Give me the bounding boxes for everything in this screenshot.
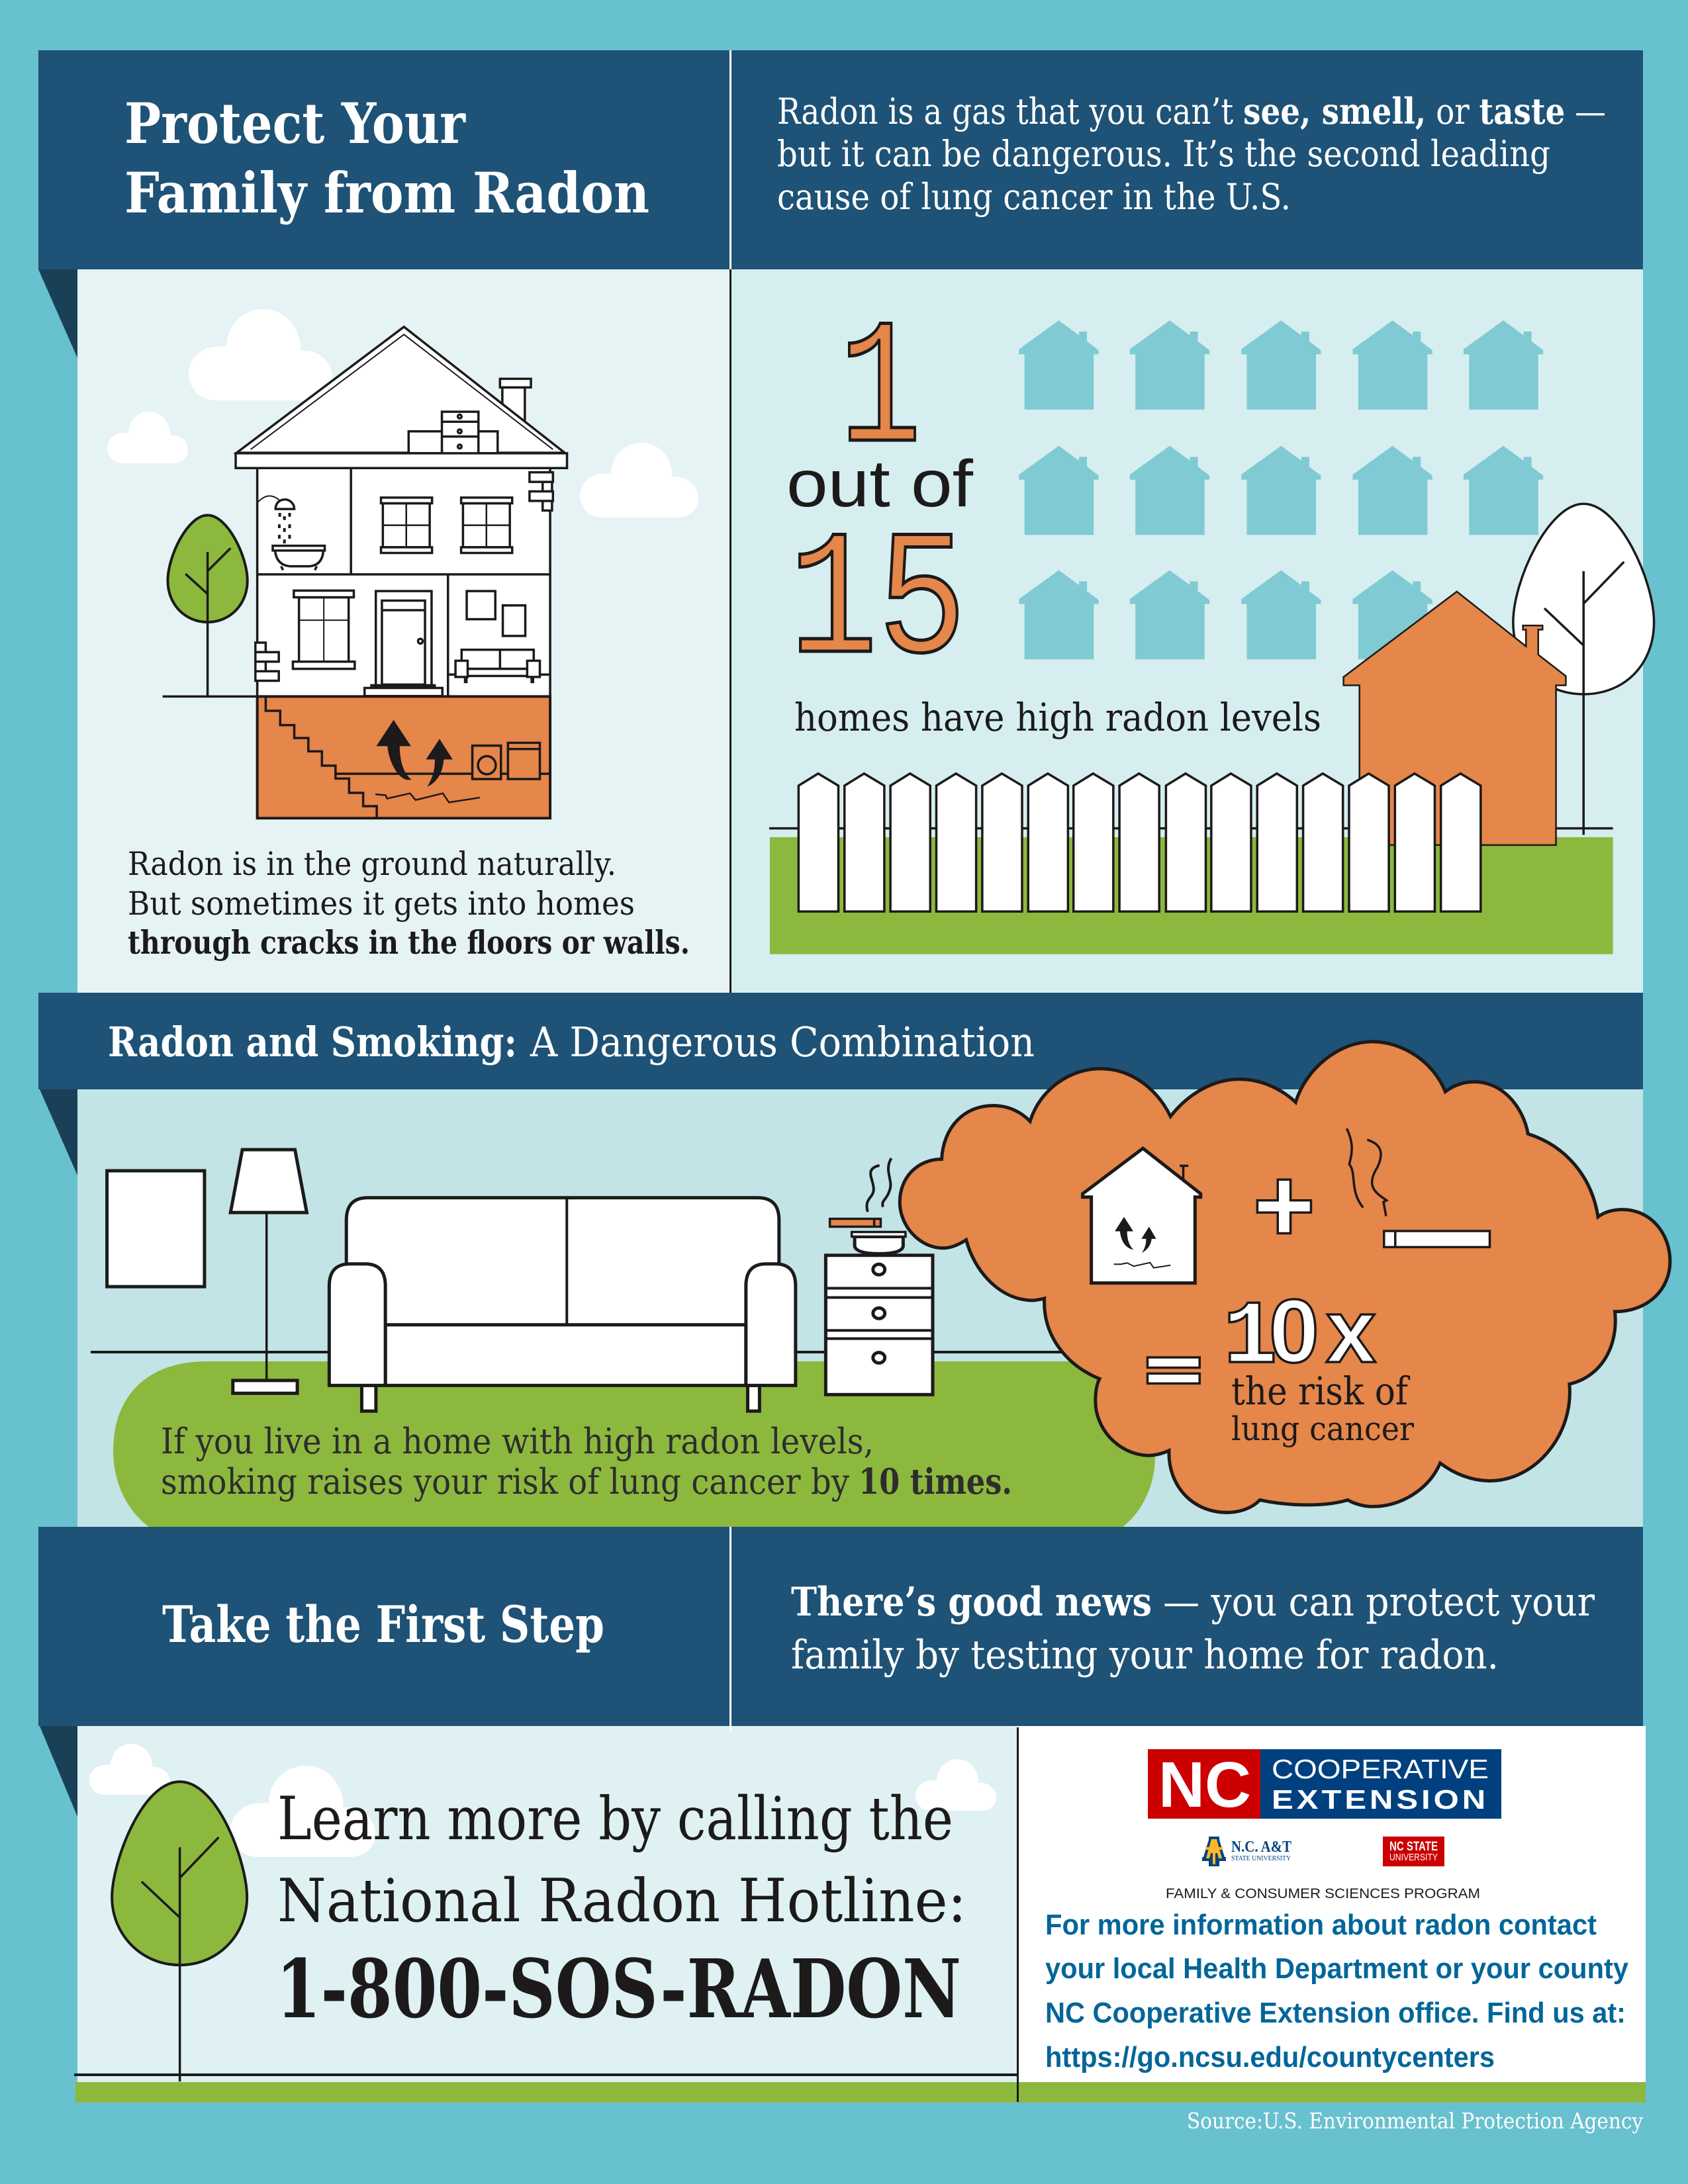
wall picture [107,1171,205,1287]
text: smoking risk: smoking raises your risk of lung cancer by [161,1462,849,1502]
green ground strip [75,2082,1646,2103]
text: hotline number: 1-800-SOS-RADON [276,1941,961,2036]
text: the risk of lung cancer: lung cancer [1231,1410,1414,1448]
text: contact info: your local Health Department or your county [1045,1952,1628,1985]
text: smoking risk [161,1422,1012,1502]
intro text: cause of lung cancer in the U.S. [777,176,1291,218]
text: program name: FAMILY & CONSUMER SCIENCES PROGRAM [1166,1886,1480,1901]
logo: NC Cooperative Extension: EXTENSION [1272,1784,1489,1815]
logo: NC State University [1383,1837,1444,1866]
text: good news: — you can protect your [1163,1579,1595,1625]
living room furniture [107,1150,933,1411]
statistic: 10x: 0 [1269,1281,1319,1381]
lower window [293,590,355,669]
illustration: house cross-section with radon entering [163,327,567,819]
icon grid: light houses [1019,320,1543,659]
fold: bottom [40,1726,77,1817]
text: the risk of lung cancer: the risk of [1231,1369,1410,1414]
ground line [74,2073,1017,2076]
icon: equals sign [1148,1357,1199,1383]
white tree [1513,504,1654,835]
clouds behind hotline text [89,1744,996,1857]
green lawn [770,837,1613,954]
tree [163,516,258,696]
text: good news: family by testing your home for radon. [791,1632,1499,1678]
logo: NC Cooperative Extension [1148,1749,1501,1821]
logo: NC State University: NC STATE [1389,1840,1438,1854]
statistic: 10x: x [1326,1281,1376,1381]
floor line [91,1351,1066,1353]
text: radon in ground: Radon is in the ground naturally. [128,845,616,883]
text: radon in ground: But sometimes it gets into homes [128,885,635,923]
vertical divider [1017,1727,1019,2102]
wall pictures and sofa [448,591,550,683]
panel: smoking room [77,1089,1643,1527]
logo: N.C. A&T [1202,1837,1291,1866]
statistic: 10x: 1 [1223,1287,1278,1389]
bar: radon and smoking: Radon and Smoking: [108,1018,517,1066]
green rug [113,1361,1155,1527]
text: homes have high radon levels: homes have high radon levels [794,695,1321,740]
bar: take the first step [38,1527,1643,1732]
title: Family from Radon [124,160,649,226]
text: good news [791,1579,1595,1678]
text: contact info: https://go.ncsu.edu/countycenters [1045,2041,1495,2073]
ground line [769,827,1613,829]
icon: house with radon [1083,1148,1201,1283]
radon arrows [376,720,453,787]
fold: middle [40,1089,77,1175]
logo: N.C. A&T: STATE UNIVERSITY [1231,1854,1291,1862]
title [124,91,649,226]
text: learn more: Learn more by calling the [277,1784,953,1854]
logo: N.C. A&T: N.C. A&T [1231,1839,1291,1856]
heading: Take the First Step [162,1595,604,1654]
green tree [112,1782,247,2081]
text: good news: There’s good news [791,1579,1152,1625]
basement [258,696,550,819]
fold: top [38,269,77,358]
text: contact info: For more information about radon contact [1045,1909,1597,1941]
panel: contact [1017,1726,1646,2082]
icon: cigarette with smoke [1346,1128,1489,1247]
chimney [500,379,531,426]
text: radon in ground [128,845,690,962]
intro text: Radon is a gas that you can’t see, smell, or taste — [777,90,1606,132]
text: contact info [1045,1909,1628,2073]
text: radon in ground: through cracks in the floors or walls. [128,923,690,962]
panel: radon in the ground [77,269,730,994]
picket fence [798,774,1481,911]
icon: plus sign [1257,1179,1311,1233]
text: smoking risk: If you live in a home with high radon levels, [161,1422,874,1462]
logo: NC Cooperative Extension: NC [1158,1749,1251,1821]
text: learn more: National Radon Hotline: [277,1866,966,1936]
statistic: 1 out of 15 [786,293,973,705]
bar: radon and smoking [38,993,1643,1089]
statistic: 1 out of 15: 15 [789,504,966,705]
text: the risk of lung cancer [1231,1369,1414,1448]
bricks [256,473,553,681]
statistic: 1 out of 15: 1 [839,293,921,494]
text: contact info: NC Cooperative Extension office. Find us at: [1045,1997,1626,2029]
logo: NC State University: UNIVERSITY [1389,1852,1438,1863]
statistic: 1 out of 15: out of [786,447,973,521]
clouds behind house [107,309,698,518]
text: learn more [277,1784,966,1936]
house and fence scene [769,320,1654,954]
orange house [1344,592,1566,845]
upper windows [381,498,512,553]
panel: 1 out of 15 homes [730,269,1654,994]
header bar: title and intro [38,50,1643,269]
side table with ashtray [825,1158,933,1394]
logo: NC Cooperative Extension: COOPERATIVE [1272,1754,1489,1784]
intro text: but it can be dangerous. It’s the second leading [777,133,1550,175]
intro text [777,90,1606,218]
sofa [329,1198,796,1411]
roof [236,327,567,468]
front door [365,591,442,696]
house body with rooms [258,468,550,696]
cloud shape [900,1042,1670,1512]
center divider [729,269,731,993]
bathtub and shower [258,496,325,570]
text: smoking risk: 10 times. [859,1461,1012,1502]
text: source: Source:U.S. Environmental Protection Agency [1187,2108,1643,2134]
callout: orange smoke cloud [900,1042,1670,1512]
floor lamp [230,1150,306,1393]
title: Protect Your [124,91,467,156]
bar: radon and smoking: A Dangerous Combination [530,1018,1035,1066]
panel: hotline [74,1726,1017,2082]
